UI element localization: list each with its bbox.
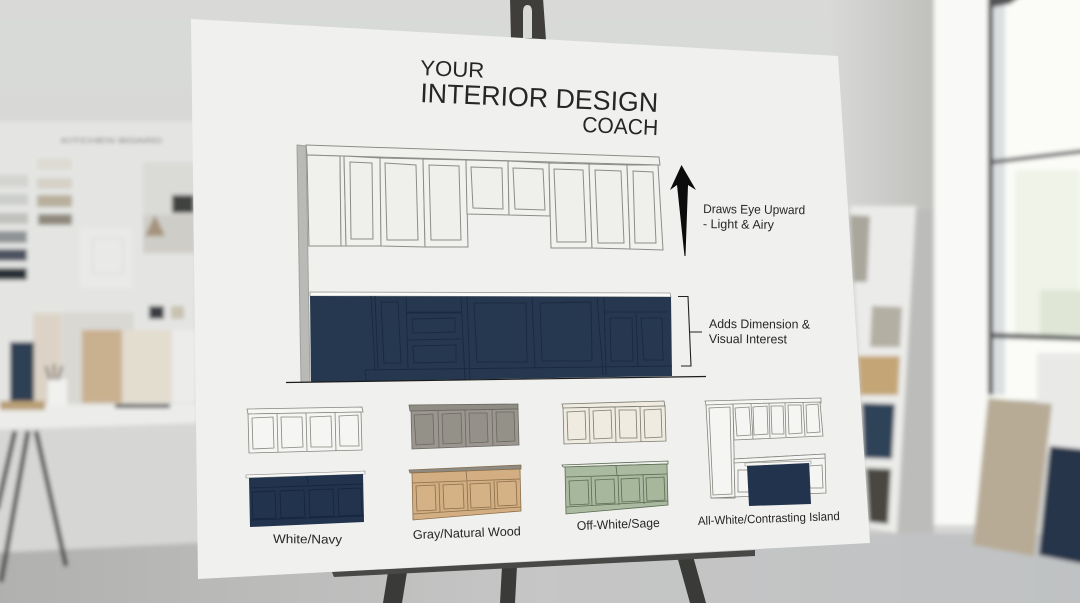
- scheme: off-white sage: [562, 401, 668, 533]
- callout: adds dimension: Visual Interest: [709, 332, 788, 346]
- navy island: [747, 463, 811, 506]
- tall door 6: [627, 165, 663, 250]
- easel legs: [383, 572, 407, 603]
- mood board heading: KITCHEN BOARD: [61, 136, 163, 145]
- label: All-White/Contrasting Island: [698, 509, 840, 528]
- off-white uppers: [562, 401, 666, 444]
- cabinet door lines: [365, 296, 672, 380]
- white uppers: [247, 407, 363, 453]
- gray uppers: [409, 404, 519, 449]
- label: Gray/Natural Wood: [413, 524, 521, 542]
- kitchen mood board: [0, 122, 196, 407]
- callout: draws eye upward: Draws Eye Upward: [703, 202, 805, 217]
- tall door 4: [549, 163, 592, 248]
- leaning white sample board: [1037, 353, 1080, 453]
- callout: draws eye upward: [703, 202, 805, 232]
- material samples on table: [10, 312, 172, 407]
- shadow behind swatch board: [896, 210, 934, 537]
- title: [420, 56, 659, 140]
- lower navy cabinets: [310, 292, 672, 382]
- left end panel: [307, 155, 341, 246]
- title: YOUR: [420, 56, 485, 83]
- navy base: [310, 296, 672, 382]
- callout: adds dimension: Adds Dimension &: [709, 317, 811, 332]
- presentation board: [191, 19, 870, 579]
- easel tray: [332, 550, 755, 577]
- table top: [0, 404, 197, 430]
- tall door 2: [380, 158, 425, 247]
- wall post: [297, 145, 310, 382]
- leaning swatch board: [850, 206, 916, 533]
- short door 1: [466, 160, 509, 215]
- callout: adds dimension: [709, 317, 811, 347]
- white kitchen line drawing: [705, 398, 826, 498]
- floor line: [286, 376, 706, 382]
- upper cabinets: [297, 145, 663, 382]
- scheme: white navy: [246, 407, 365, 547]
- right wall column: [825, 0, 934, 538]
- label: White/Navy: [273, 532, 343, 547]
- title: COACH: [582, 112, 659, 140]
- short door 2: [508, 161, 550, 216]
- bracket: [678, 296, 702, 366]
- crown molding: [306, 145, 660, 165]
- tall door 3: [423, 159, 468, 247]
- leaning wood sample: [973, 398, 1052, 556]
- title: INTERIOR DESIGN: [420, 78, 659, 118]
- tall door 5: [589, 164, 630, 249]
- window: [988, 0, 1080, 400]
- sage base: [562, 461, 668, 514]
- label: Off-White/Sage: [577, 516, 660, 533]
- countertop: [310, 292, 671, 297]
- easel mast: [510, 0, 546, 40]
- upward arrow: [670, 165, 696, 256]
- wood base: [409, 465, 521, 520]
- curtain: [934, 0, 988, 525]
- navy base: [246, 471, 365, 527]
- tall door 1: [344, 156, 381, 246]
- scheme: all-white contrasting island: [698, 398, 840, 528]
- scheme: gray natural wood: [409, 404, 521, 542]
- leaning navy sample: [1039, 446, 1080, 565]
- floor: [0, 533, 1080, 603]
- callout: draws eye upward: - Light & Airy: [703, 217, 775, 232]
- easel: [332, 0, 755, 603]
- table legs: [0, 431, 66, 582]
- island countertop: [745, 461, 811, 466]
